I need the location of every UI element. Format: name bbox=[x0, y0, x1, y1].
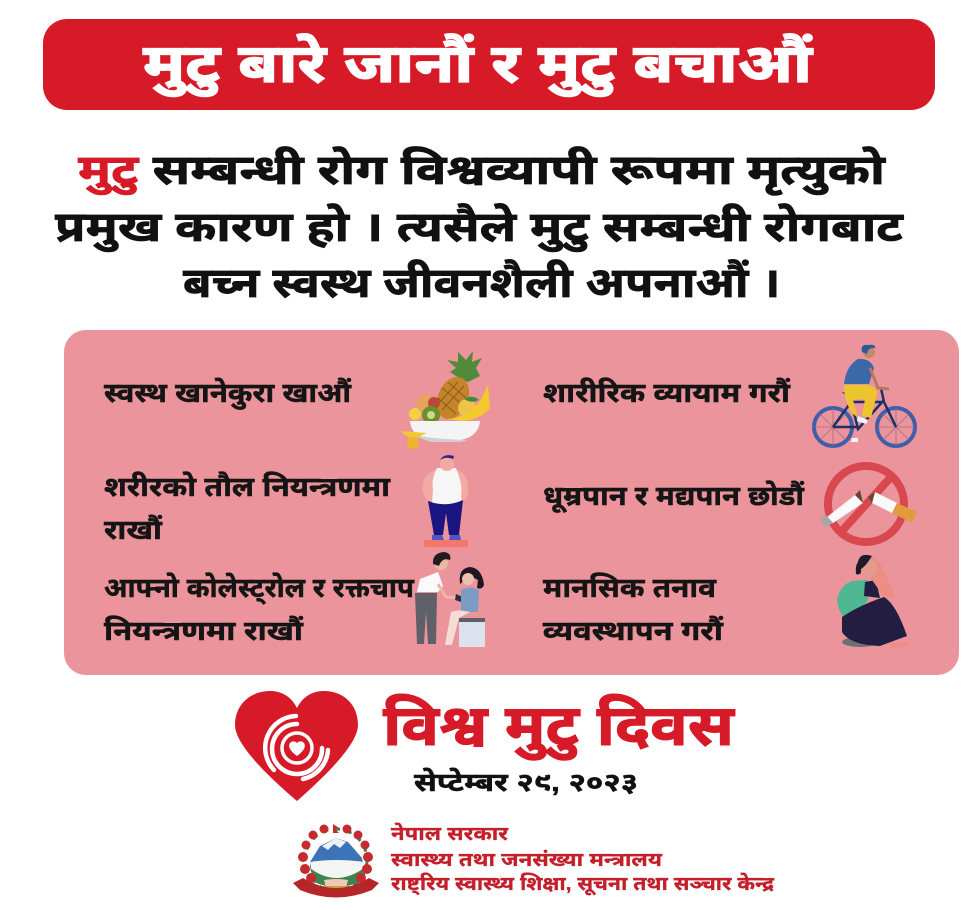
government organisation text: स्वास्थ्य तथा जनसंख्या मन्त्रालय bbox=[391, 849, 663, 871]
intro text: मुटु सम्बन्धी रोग विश्वव्यापी रूपमा मृत्युको bbox=[78, 146, 886, 196]
tip: exercise: शारीरिक व्यायाम गरौं bbox=[543, 377, 791, 408]
intro text: बच्न स्वस्थ जीवनशैली अपनाऔं । bbox=[183, 259, 780, 306]
intro text: प्रमुख कारण हो । त्यसैले मुटु सम्बन्धी रोगबाट bbox=[55, 203, 905, 252]
heading: world heart day: विश्व मुटु दिवस bbox=[383, 693, 735, 761]
icon: blood pressure check bbox=[415, 552, 485, 647]
tip: stress management: मानसिक तनाव bbox=[543, 573, 717, 603]
panel: healthy habits bbox=[64, 330, 959, 675]
icon: heart logo bbox=[235, 691, 358, 801]
date: सेप्टेम्बर २९, २०२३ bbox=[414, 767, 638, 797]
tip: stress management: व्यवस्थापन गरौं bbox=[542, 615, 724, 646]
title banner: मुटु बारे जानौं र मुटु बचाऔं bbox=[143, 33, 813, 98]
emblem of Nepal bbox=[293, 810, 379, 898]
icon: cyclist bbox=[814, 345, 915, 446]
tip: healthy food: स्वस्थ खानेकुरा खाऔं bbox=[104, 377, 352, 409]
government organisation text bbox=[391, 822, 774, 896]
icon: fruit bowl bbox=[400, 351, 490, 449]
tip: body weight: शरीरको तौल नियन्त्रणमा bbox=[104, 472, 391, 502]
title banner bbox=[43, 19, 935, 110]
tip: stress management bbox=[542, 573, 724, 646]
government organisation text: नेपाल सरकार bbox=[391, 822, 509, 845]
tip: cholesterol and blood pressure: आफ्नो कोलेस्ट्रोल र रक्तचाप bbox=[104, 572, 415, 605]
intro text bbox=[55, 146, 905, 306]
tip: cholesterol and blood pressure bbox=[104, 572, 415, 646]
icon: no smoking bbox=[820, 466, 917, 542]
tip: cholesterol and blood pressure: नियन्त्रणमा राखौं bbox=[104, 615, 304, 646]
tip: body weight: राखौं bbox=[104, 514, 163, 545]
icon: stressed woman bbox=[837, 555, 910, 648]
icon: person on scale bbox=[423, 455, 468, 547]
tip: quit smoking and alcohol: धूम्रपान र मद्यपान छोडौं bbox=[543, 480, 805, 513]
government organisation text: राष्ट्रिय स्वास्थ्य शिक्षा, सूचना तथा सञ्चार केन्द्र bbox=[391, 872, 774, 896]
tip: body weight bbox=[104, 472, 391, 545]
